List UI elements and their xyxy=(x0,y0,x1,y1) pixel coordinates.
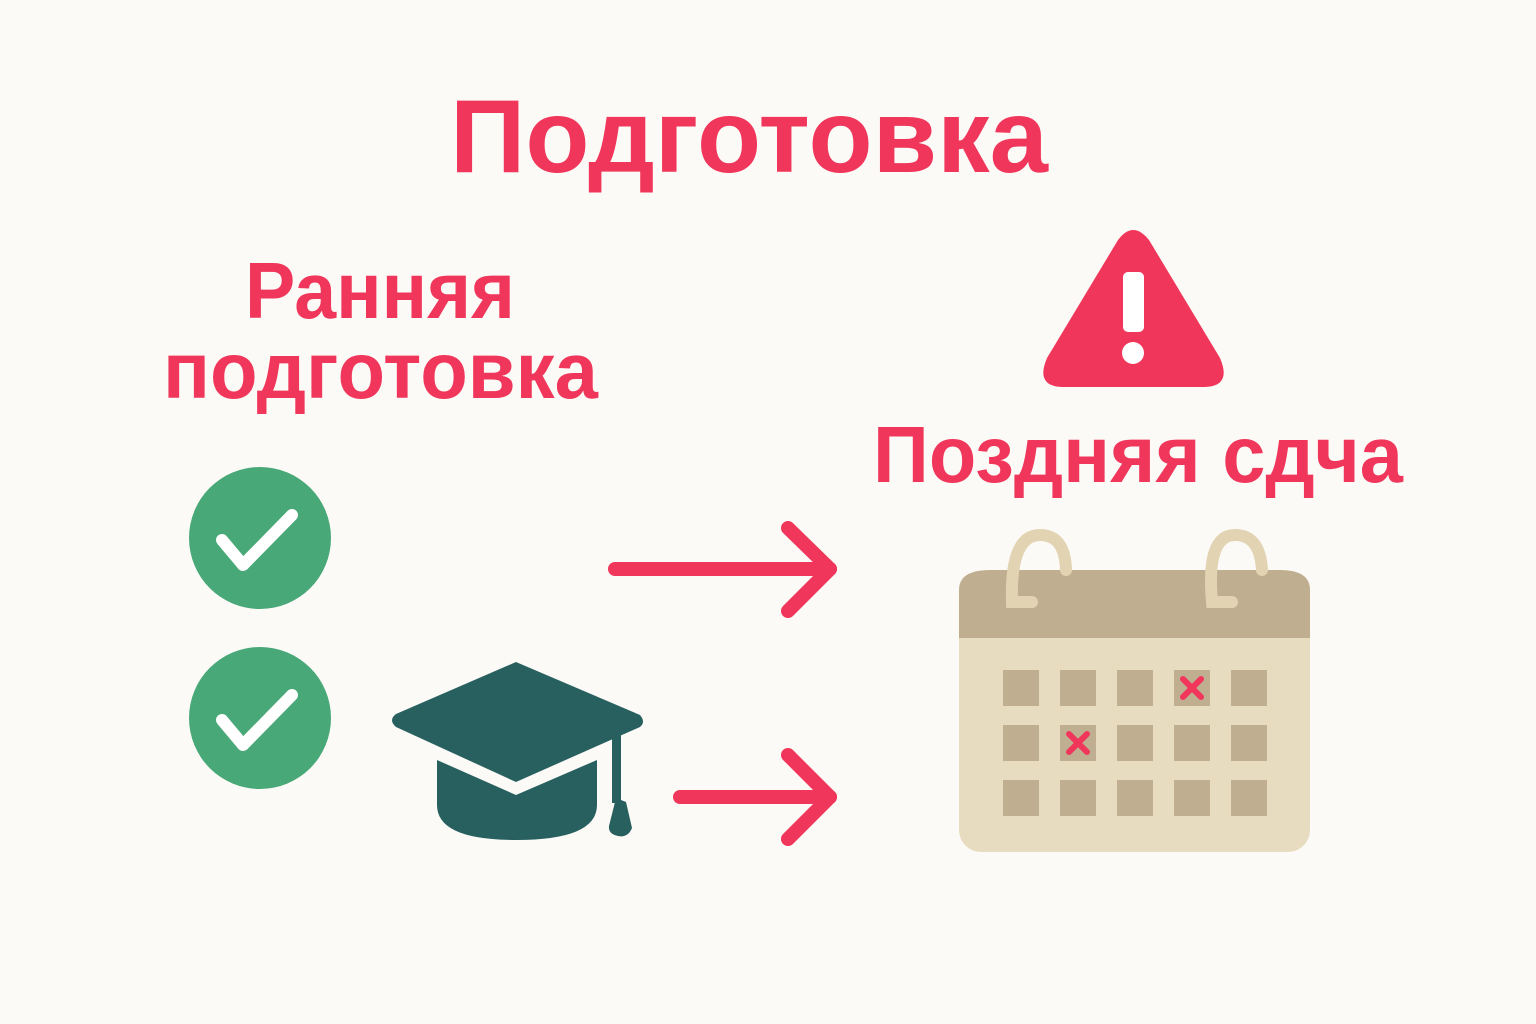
heading: early preparation: Ранняя xyxy=(245,246,515,335)
heading: late submission: Поздняя сдча xyxy=(873,410,1403,499)
icon: check 2 xyxy=(189,647,331,789)
icon: graduation cap xyxy=(392,662,643,840)
title: Подготовка xyxy=(450,79,1049,195)
heading: early preparation: подготовка xyxy=(163,326,598,415)
arrow: top xyxy=(615,528,830,611)
arrow: bottom xyxy=(680,755,830,839)
icon: warning triangle xyxy=(1043,230,1224,387)
icon: calendar xyxy=(959,535,1310,852)
heading: early preparation xyxy=(163,246,598,415)
icon: check 1 xyxy=(189,467,331,609)
